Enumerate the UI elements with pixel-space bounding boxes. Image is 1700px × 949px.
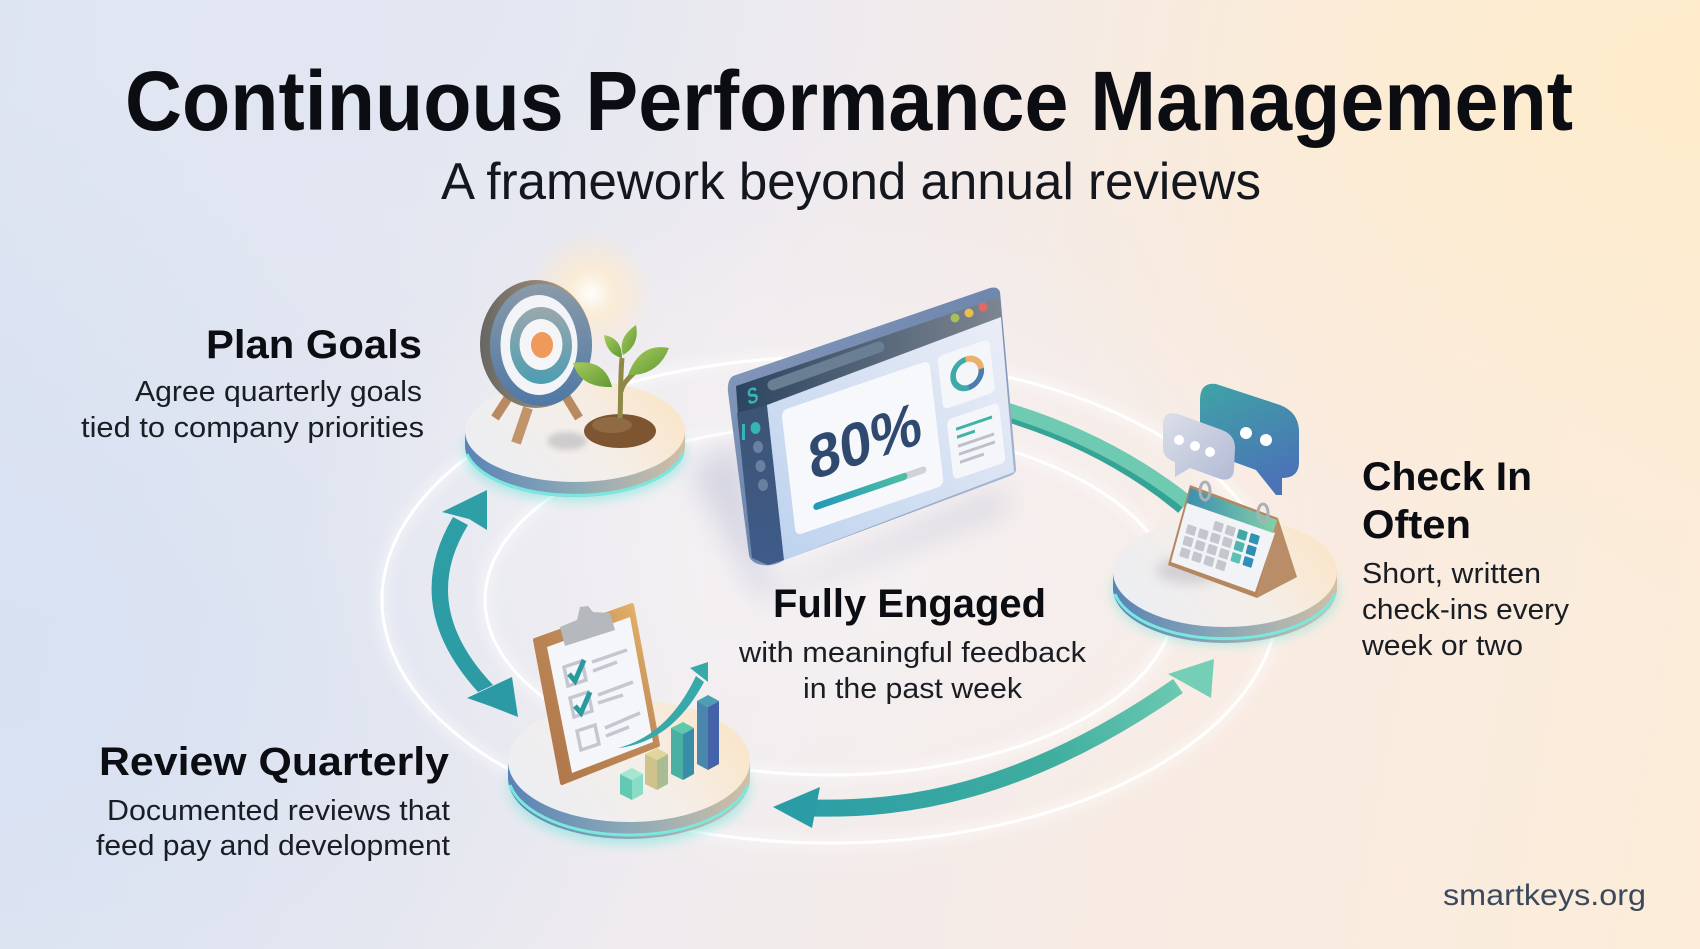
icon: clipboard and growth chart: [535, 605, 719, 800]
donut card: [937, 339, 995, 410]
arrow: review to check in, two-way: [773, 659, 1214, 828]
platform: plan goals: [465, 380, 685, 501]
sidebar icons: [742, 422, 768, 491]
label: fully engaged: Fully Engaged: [773, 582, 1046, 626]
subtitle: A framework beyond annual reviews: [441, 153, 1261, 211]
label: plan goals: Plan Goals: [206, 323, 422, 367]
label: plan goals: [81, 323, 424, 444]
arrow: check in to dashboard: [1008, 410, 1187, 506]
platform: check in often: [1113, 517, 1337, 644]
label: review quarterly: Documented reviews that: [107, 795, 450, 827]
label: check in often: Check In: [1362, 455, 1532, 499]
label: check in often: week or two: [1361, 630, 1523, 662]
label: review quarterly: Review Quarterly: [99, 740, 450, 784]
label: check in often: Short, written: [1362, 558, 1541, 590]
metric card: 80%: [805, 389, 925, 494]
grey bubble: [1163, 413, 1235, 480]
label: check in often: check-ins every: [1362, 594, 1570, 626]
icon: calendar: [1156, 482, 1297, 598]
blue bubble: [1200, 384, 1299, 495]
platform: review quarterly: [508, 700, 750, 844]
dashboard content in panel perspective: [781, 338, 1006, 536]
label: check in often: Often: [1362, 503, 1471, 547]
text card: [947, 402, 1006, 480]
label: review quarterly: feed pay and development: [96, 830, 450, 862]
cycle rings: [382, 357, 1278, 843]
label: plan goals: Agree quarterly goals: [135, 376, 422, 408]
label: fully engaged: in the past week: [803, 673, 1023, 705]
dashboard panel: [690, 288, 1016, 600]
icon: chat bubbles: [1163, 384, 1299, 495]
address bar: [773, 347, 879, 385]
bar chart: [620, 695, 719, 800]
label: check in often: [1361, 455, 1570, 662]
title: Continuous Performance Management: [125, 54, 1573, 148]
arrow: review to plan, two-way: [432, 490, 518, 717]
label: review quarterly: [96, 740, 450, 862]
label: plan goals: tied to company priorities: [81, 412, 424, 444]
window controls: [950, 302, 988, 322]
growth arrow: [618, 662, 708, 748]
label: fully engaged: [738, 582, 1087, 705]
source credit: smartkeys.org: [1443, 879, 1646, 912]
label: fully engaged: with meaningful feedback: [738, 637, 1087, 669]
icon: target and sapling: [480, 231, 669, 450]
clipboard: [535, 605, 658, 783]
metric card: [781, 360, 944, 536]
app logo: S: [746, 381, 760, 410]
